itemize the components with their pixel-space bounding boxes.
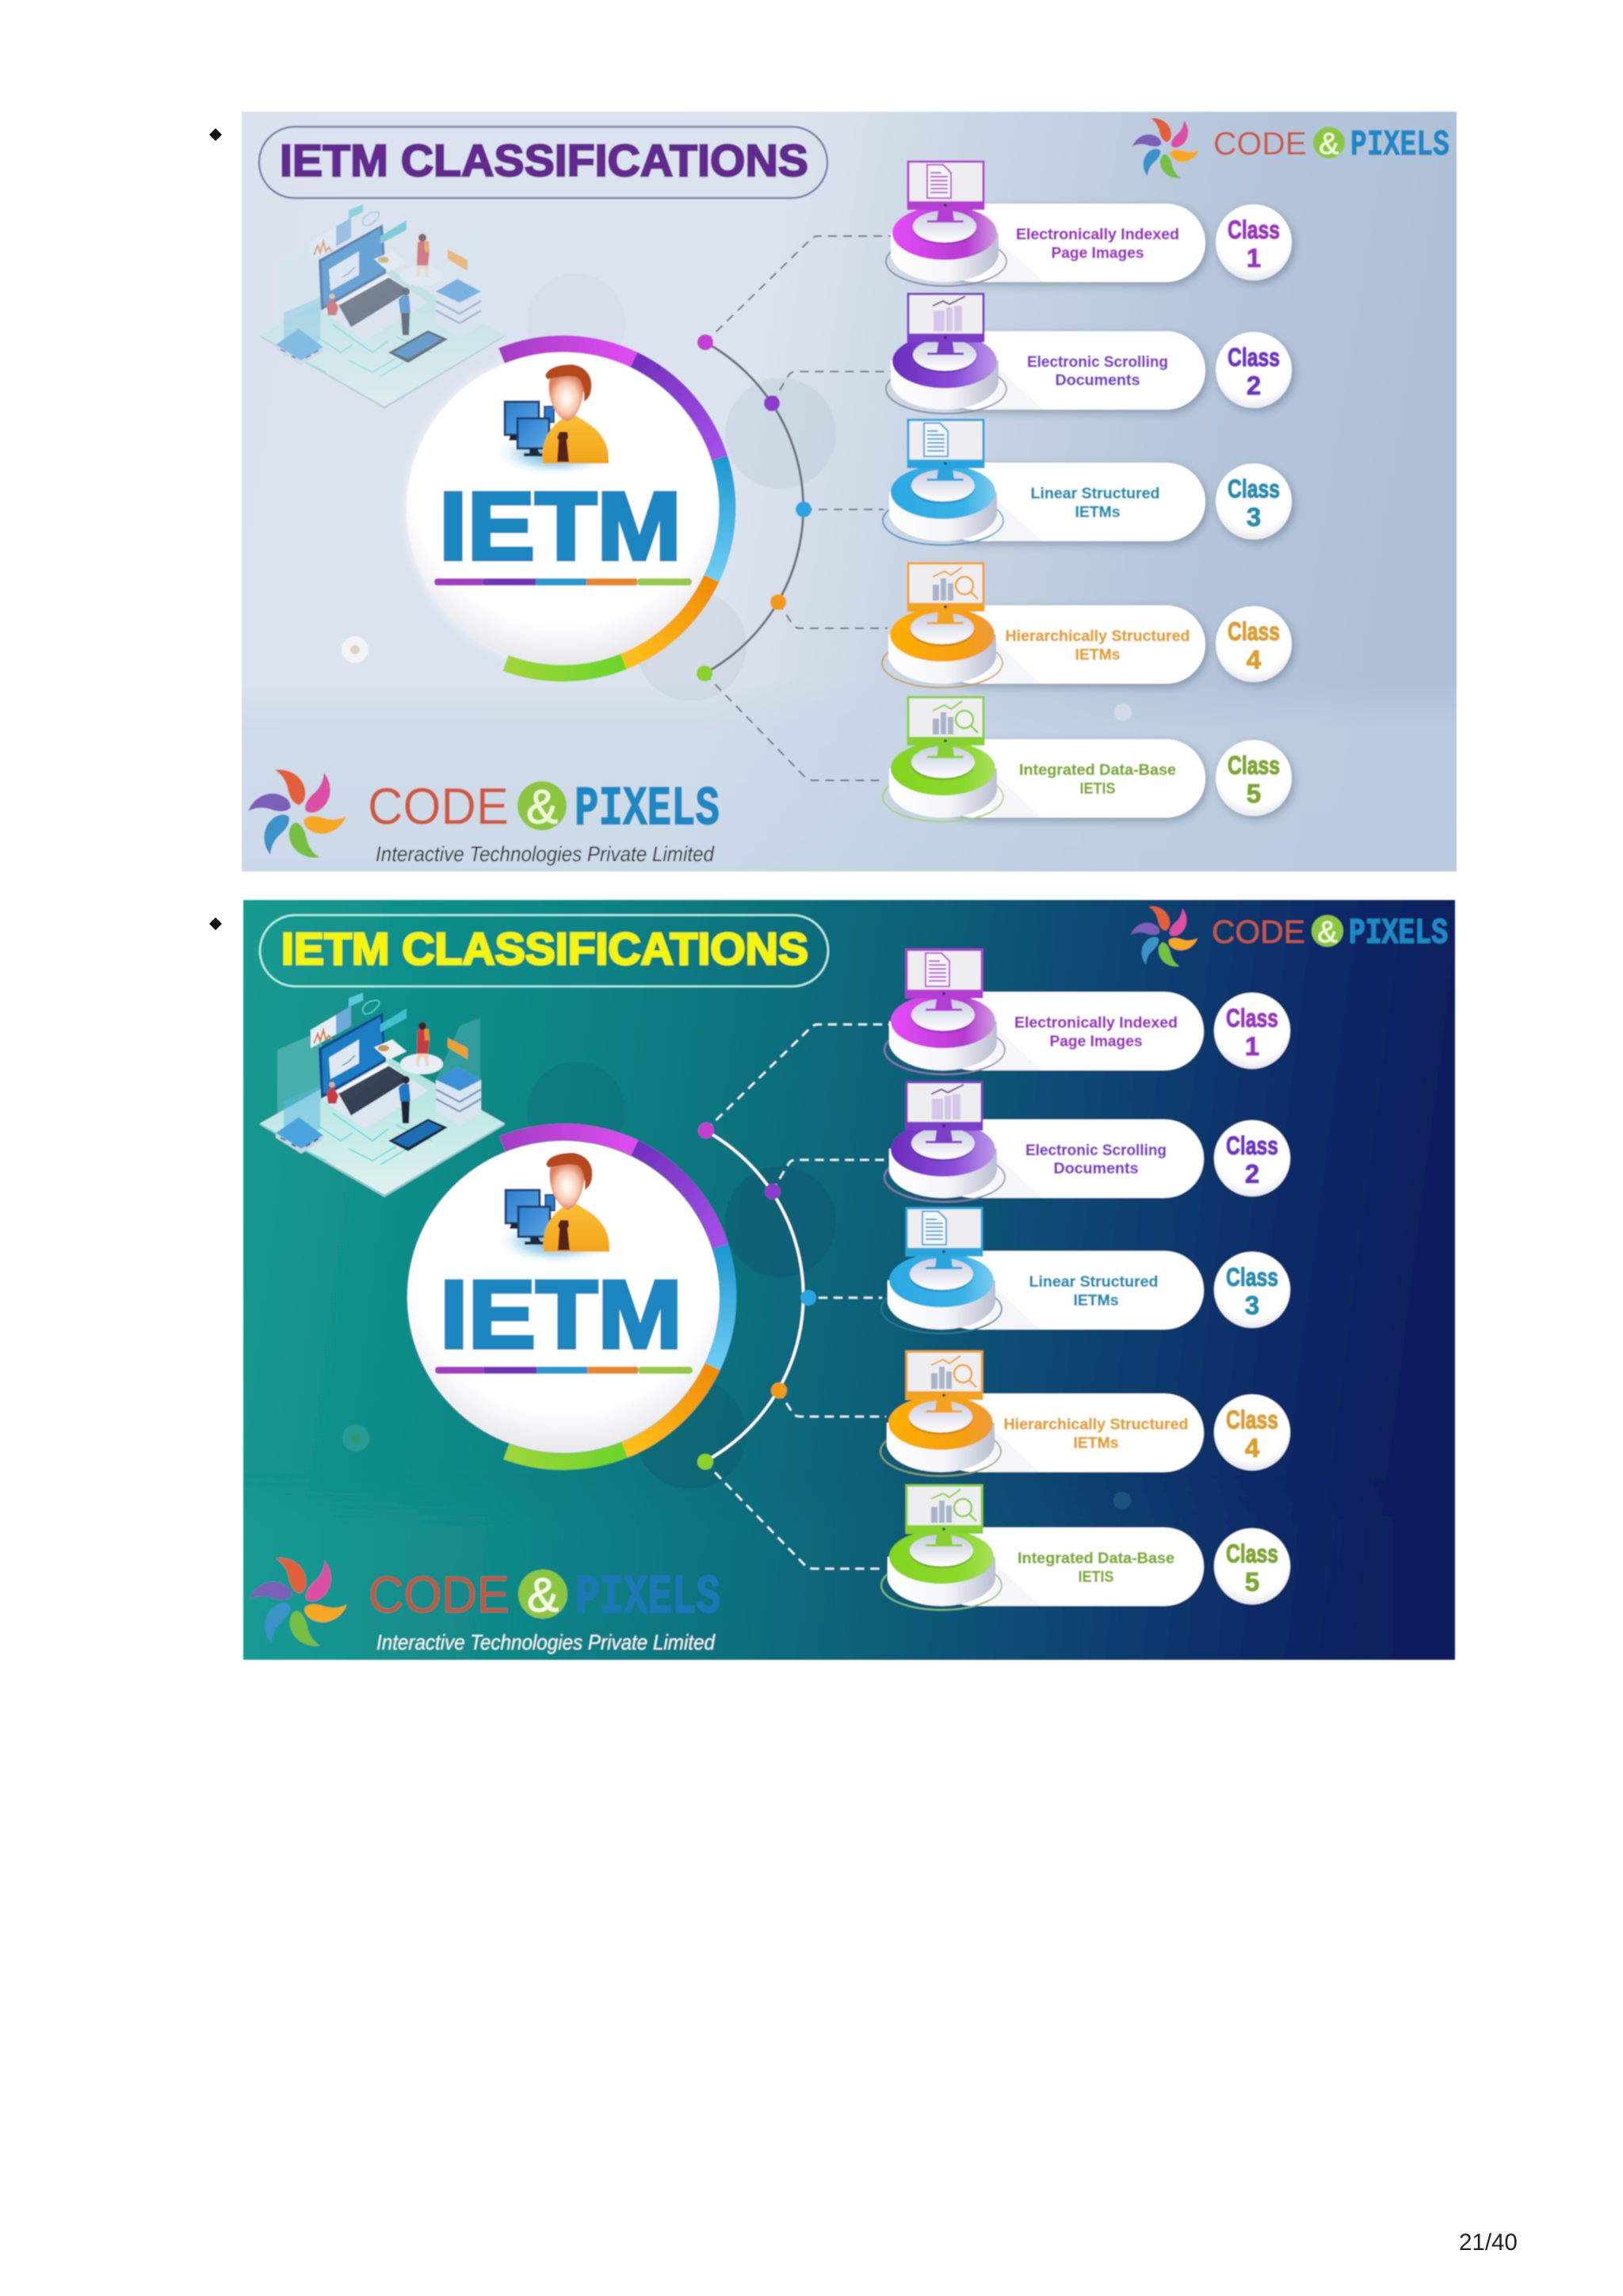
row 5: integrated data-base IETIS xyxy=(883,697,1292,822)
row 3: linear structured IETMs: Linear Structured xyxy=(1030,486,1160,502)
row 5: integrated data-base IETIS: 5 xyxy=(1247,779,1261,808)
connector nodes xyxy=(697,334,812,681)
row 5: integrated data-base IETIS: Class xyxy=(1228,751,1280,780)
row 4: hierarchically structured IETMs: 4 xyxy=(1245,1433,1260,1463)
isometric technology illustration xyxy=(260,204,505,409)
row 4: hierarchically structured IETMs: Class xyxy=(1226,1405,1278,1434)
row 1: electronically indexed page images: Page Images xyxy=(1049,1033,1143,1051)
row 3: linear structured IETMs xyxy=(883,420,1292,545)
slide 2: dark IETM classifications xyxy=(243,900,1455,1660)
page number: 21/40 xyxy=(1459,2229,1518,2256)
row 3: linear structured IETMs: Class xyxy=(1226,1263,1278,1291)
row 5: integrated data-base IETIS: 5 xyxy=(1245,1567,1259,1596)
row 2: electronic scrolling documents: Electronic Scrolling xyxy=(1027,354,1168,371)
multicolour ring xyxy=(502,1132,728,1462)
icon: person with monitors xyxy=(493,364,617,477)
row 4: hierarchically structured IETMs: IETMs xyxy=(1073,1436,1119,1451)
multicolour ring xyxy=(502,344,727,673)
row 2: electronic scrolling documents: 2 xyxy=(1245,1159,1259,1188)
title pill xyxy=(260,915,828,986)
title pill xyxy=(259,127,827,198)
isometric technology illustration xyxy=(260,993,505,1197)
connector arc and dashed lines xyxy=(705,1024,889,1569)
row 3: linear structured IETMs: 3 xyxy=(1247,502,1261,532)
row 4: hierarchically structured IETMs: Class xyxy=(1228,617,1280,646)
bottom left logo: CODE xyxy=(368,777,509,835)
bottom left logo: & xyxy=(527,1569,559,1622)
row 1: electronically indexed page images: Electronically Indexed xyxy=(1014,1015,1178,1032)
row 4: hierarchically structured IETMs xyxy=(880,1352,1290,1476)
slide 1: light IETM classifications xyxy=(242,112,1457,871)
top right logo: & xyxy=(1319,128,1339,161)
row 5: integrated data-base IETIS: Integrated Data-Base xyxy=(1018,1550,1174,1567)
connector nodes xyxy=(697,1123,816,1470)
top right logo: PIXELS xyxy=(1349,913,1448,954)
row 3: linear structured IETMs: IETMs xyxy=(1073,1293,1119,1309)
row 1: electronically indexed page images xyxy=(884,950,1290,1074)
row 1: electronically indexed page images xyxy=(886,162,1292,286)
row 5: integrated data-base IETIS: Integrated Data-Base xyxy=(1019,762,1176,779)
row 5: integrated data-base IETIS: IETIS xyxy=(1079,781,1116,797)
bottom left logo xyxy=(249,1558,720,1654)
row 2: electronic scrolling documents xyxy=(884,1082,1290,1202)
row 2: electronic scrolling documents: 2 xyxy=(1247,371,1261,400)
top right logo xyxy=(1132,118,1449,178)
row 1: electronically indexed page images: 1 xyxy=(1245,1032,1259,1061)
row 2: electronic scrolling documents xyxy=(886,294,1292,414)
row 4: hierarchically structured IETMs: IETMs xyxy=(1075,646,1121,664)
top right logo: CODE xyxy=(1212,913,1305,950)
bottom left logo: PIXELS xyxy=(575,779,720,841)
row 3: linear structured IETMs: Linear Structured xyxy=(1029,1274,1159,1291)
row 4: hierarchically structured IETMs: Hierarchically Structured xyxy=(1005,628,1190,645)
slide 2 background xyxy=(243,900,1455,1660)
rainbow underline xyxy=(434,578,692,585)
bottom left logo: PIXELS xyxy=(575,1567,720,1630)
IETM wordmark: IETM xyxy=(439,472,682,580)
bullet 1 xyxy=(209,128,222,141)
row 3: linear structured IETMs xyxy=(881,1208,1290,1333)
row 3: linear structured IETMs: 3 xyxy=(1245,1291,1259,1320)
row 5: integrated data-base IETIS xyxy=(881,1486,1290,1610)
row 2: electronic scrolling documents: Documents xyxy=(1054,1161,1138,1177)
row 4: hierarchically structured IETMs: 4 xyxy=(1247,645,1262,674)
bottom left logo xyxy=(248,769,720,866)
bullet 2 xyxy=(209,917,222,930)
row 3: linear structured IETMs: IETMs xyxy=(1075,504,1121,521)
slide 1 background xyxy=(242,112,1457,871)
bottom left logo: Interactive Technologies Private Limited xyxy=(376,842,715,866)
row 2: electronic scrolling documents: Class xyxy=(1226,1131,1278,1160)
row 3: linear structured IETMs: Class xyxy=(1228,475,1280,503)
rainbow underline xyxy=(435,1367,693,1374)
row 2: electronic scrolling documents: Documents xyxy=(1056,372,1140,389)
connector arc and dashed lines xyxy=(705,236,891,780)
icon: person with monitors xyxy=(494,1153,617,1265)
top right logo: & xyxy=(1317,916,1338,949)
row 4: hierarchically structured IETMs: Hierarchically Structured xyxy=(1003,1417,1189,1433)
row 1: electronically indexed page images: Electronically Indexed xyxy=(1016,227,1179,243)
row 1: electronically indexed page images: 1 xyxy=(1247,243,1261,273)
title pill: IETM CLASSIFICATIONS xyxy=(280,135,808,186)
top right logo: CODE xyxy=(1213,125,1307,162)
title pill: IETM CLASSIFICATIONS xyxy=(281,924,808,974)
bottom left logo: Interactive Technologies Private Limited xyxy=(376,1630,716,1654)
central IETM circle badge xyxy=(407,344,727,673)
bottom left logo: CODE xyxy=(369,1566,510,1623)
row 5: integrated data-base IETIS: IETIS xyxy=(1078,1569,1114,1586)
row 2: electronic scrolling documents: Class xyxy=(1228,343,1280,372)
top right logo: PIXELS xyxy=(1350,125,1449,166)
top right logo xyxy=(1131,906,1448,967)
row 2: electronic scrolling documents: Electronic Scrolling xyxy=(1025,1142,1167,1159)
central IETM circle badge xyxy=(407,1132,728,1462)
row 1: electronically indexed page images: Page Images xyxy=(1051,246,1144,261)
row 1: electronically indexed page images: Class xyxy=(1226,1004,1278,1032)
row 4: hierarchically structured IETMs xyxy=(882,563,1292,688)
row 1: electronically indexed page images: Class xyxy=(1228,215,1280,244)
row 5: integrated data-base IETIS: Class xyxy=(1226,1539,1278,1568)
IETM wordmark: IETM xyxy=(440,1261,682,1368)
bottom left logo: & xyxy=(526,780,558,833)
